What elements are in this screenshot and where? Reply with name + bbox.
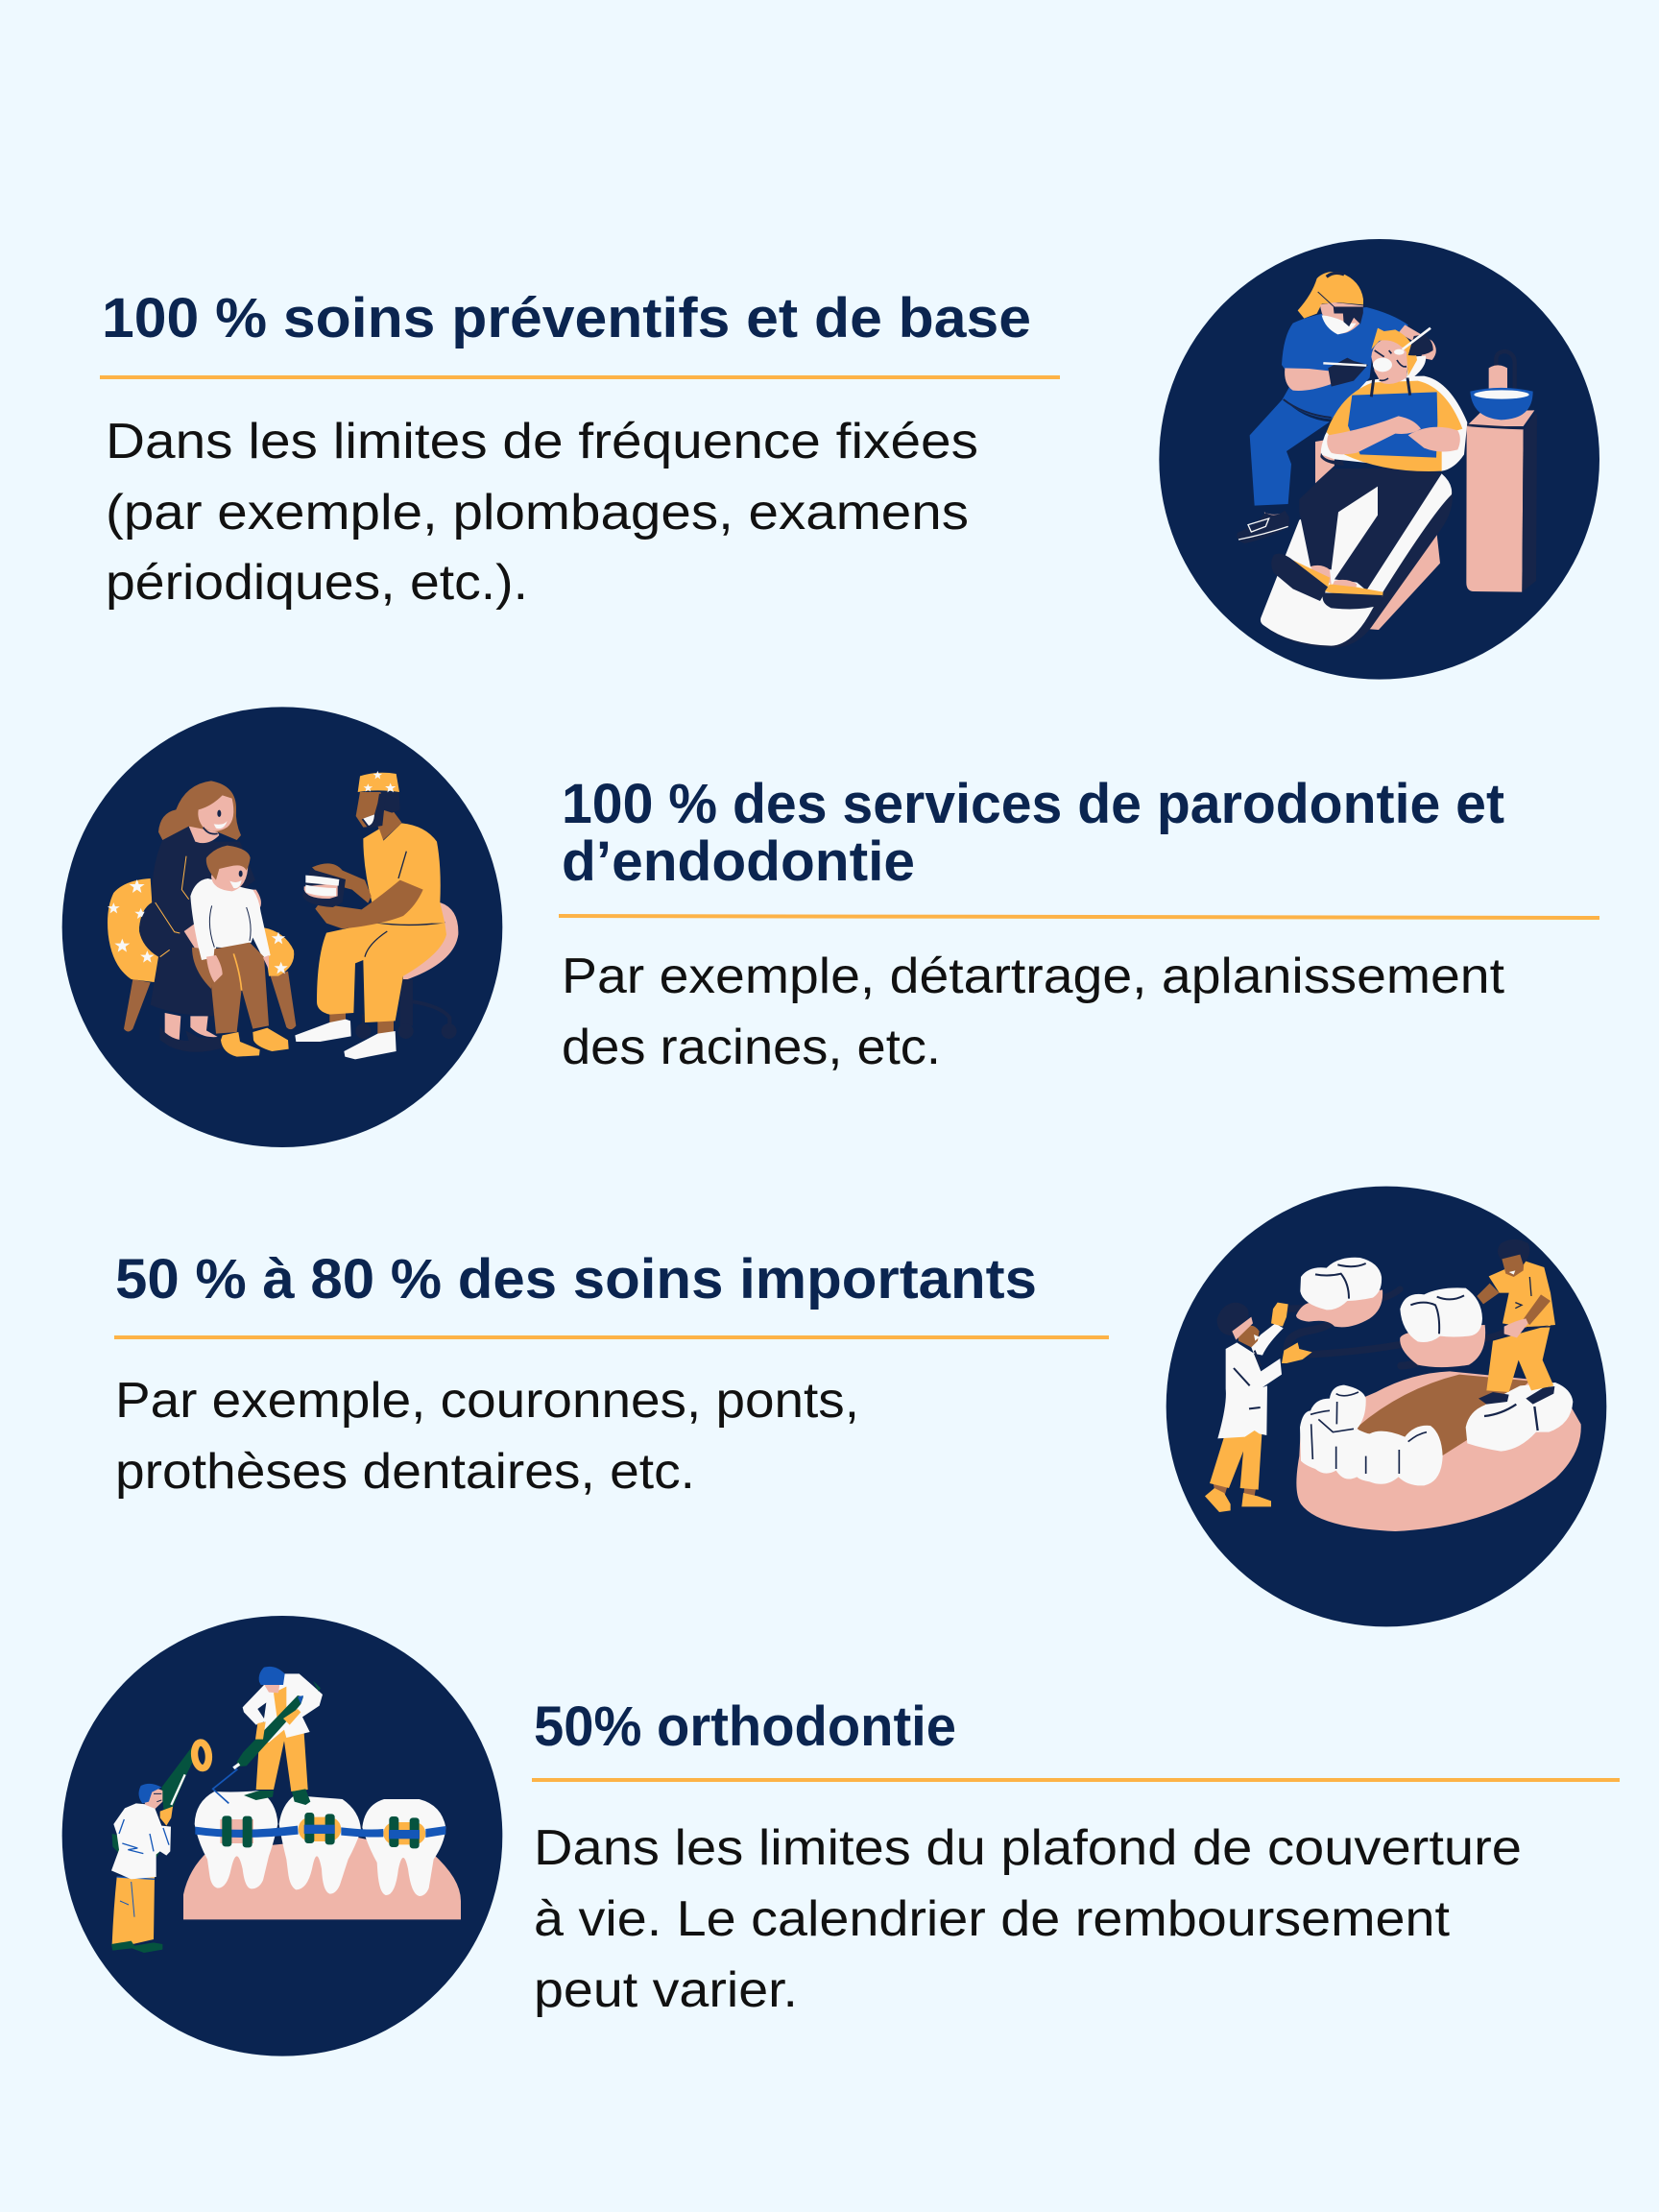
text block: soins importants xyxy=(115,1373,859,1500)
left dentist holding ring tool xyxy=(111,1740,210,1953)
patient figure xyxy=(1271,328,1462,609)
text block: orthodontie: à vie. Le calendrier de remboursement xyxy=(534,1891,1451,1947)
icon: dentist showing denture to mother and child xyxy=(62,707,502,1147)
icon: dentist treating a patient in a chair xyxy=(1159,239,1599,680)
mother figure xyxy=(139,781,261,1052)
text block: orthodontie: Dans les limites du plafond de couverture xyxy=(534,1820,1522,1876)
text block: orthodontie xyxy=(534,1820,1522,2018)
dentist with cap and denture xyxy=(295,771,458,1059)
heading: 50% orthodontie: 50% orthodontie xyxy=(534,1695,956,1758)
text block: soins importants: prothèses dentaires, etc. xyxy=(115,1444,695,1500)
cabinet and sink xyxy=(1466,351,1537,592)
dentist figure xyxy=(1237,272,1436,543)
implant cables xyxy=(1286,1289,1509,1366)
heading: 100 % des services: 100 % des services de parodontie et xyxy=(562,773,1504,835)
text block: soins importants: Par exemple, couronnes, ponts, xyxy=(115,1373,859,1429)
child figure xyxy=(190,846,289,1057)
floating crowns xyxy=(1296,1258,1485,1367)
panel: orthodontie xyxy=(62,1616,1620,2056)
standing dentist with tool xyxy=(213,1667,323,1805)
text block: orthodontie: peut varier. xyxy=(534,1962,798,2018)
heading: 50 % à 80 %: 50 % à 80 % des soins importants xyxy=(115,1248,1037,1310)
gum xyxy=(183,1837,461,1919)
text block: parodontie: des racines, etc. xyxy=(562,1020,941,1075)
teeth with braces xyxy=(195,1791,445,1896)
left dentist in white coat xyxy=(1205,1303,1312,1512)
text block: soins préventifs xyxy=(106,414,978,611)
dental chair xyxy=(1261,376,1467,648)
text block: parodontie xyxy=(562,949,1505,1075)
text block: soins préventifs: périodiques, etc.). xyxy=(106,555,528,611)
right dentist standing on denture xyxy=(1477,1239,1555,1405)
heading: 100 % des services xyxy=(562,773,1504,893)
armchair with stars xyxy=(108,878,296,1031)
icon: crowns and bridges on a large denture xyxy=(1166,1187,1606,1626)
heading: 100 % des services: d’endodontie xyxy=(562,830,915,893)
icon: dentists fitting braces on teeth xyxy=(62,1616,502,2056)
text block: soins préventifs: (par exemple, plombages, examens xyxy=(106,485,969,541)
panel: soins préventifs et de base xyxy=(100,239,1599,680)
text block: parodontie: Par exemple, détartrage, aplanissement xyxy=(562,949,1505,1004)
panel: soins importants xyxy=(114,1187,1606,1626)
heading: 100 % soins préventifs: 100 % soins préventifs et de base xyxy=(102,287,1031,349)
large denture xyxy=(1296,1371,1581,1531)
text block: soins préventifs: Dans les limites de fréquence fixées xyxy=(106,414,978,469)
panel: parodontie et endodontie xyxy=(62,707,1599,1147)
